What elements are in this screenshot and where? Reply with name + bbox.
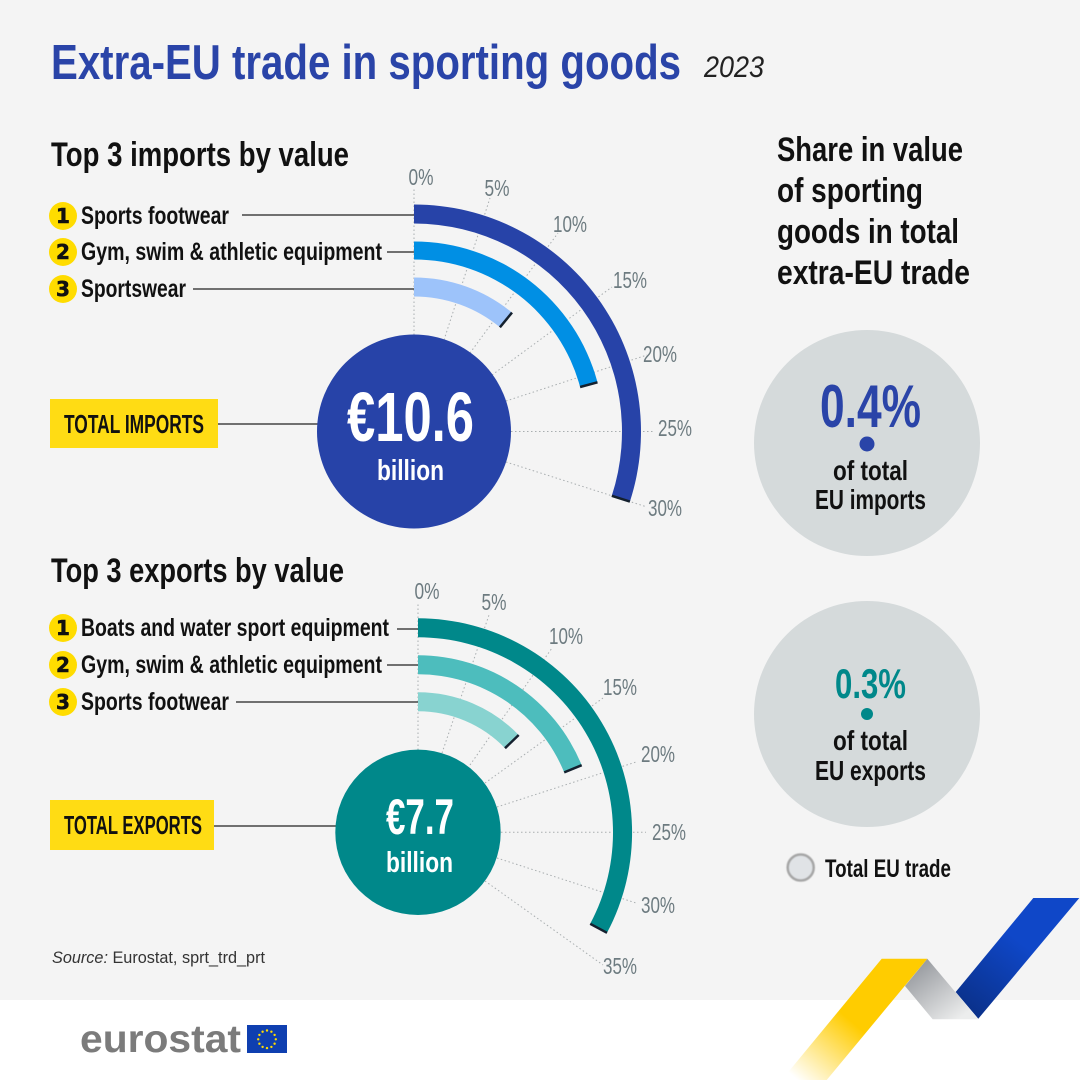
share heading: extra-EU trade <box>777 254 970 292</box>
exports item 2: Gym, swim & athletic equipment <box>81 651 383 679</box>
imports share circle: 0.4% <box>820 373 921 440</box>
exports share circle <box>754 601 980 827</box>
exports percentage scale: 25% <box>652 819 686 845</box>
legend: total EU trade <box>788 854 951 883</box>
imports item 3: Sportswear <box>81 275 186 303</box>
imports item 3 <box>49 275 414 303</box>
share heading: Share in value <box>777 131 963 169</box>
imports arc 2: gym, swim and athletic equipment <box>414 242 598 387</box>
imports item 2: Gym, swim & athletic equipment <box>81 238 383 266</box>
exports percentage scale: 30% <box>641 892 675 918</box>
imports arc 3: sportswear <box>414 277 512 327</box>
year: 2023 <box>703 51 764 84</box>
imports item 1: Sports footwear <box>81 202 229 230</box>
total imports circle: billion <box>377 455 444 487</box>
exports share circle: EU exports <box>815 755 926 786</box>
exports item 3: Sports footwear <box>81 688 229 716</box>
share heading: of sporting <box>777 172 923 210</box>
source: Source: Eurostat, sprt_trd_prt <box>52 948 265 967</box>
imports share circle: of total <box>833 455 908 486</box>
exports item 2: 2 <box>56 653 70 677</box>
imports percentage scale: 20% <box>643 341 677 367</box>
imports percentage scale: 5% <box>484 175 510 201</box>
exports arc 3: sports footwear <box>418 692 519 748</box>
exports percentage scale: 10% <box>549 623 583 649</box>
imports percentage scale: 30% <box>648 495 682 521</box>
exports percentage scale: 15% <box>603 674 637 700</box>
imports percentage scale: 25% <box>658 415 692 441</box>
total imports circle: €10.6 <box>347 378 474 456</box>
total exports circle: €7.7 <box>386 789 454 845</box>
footer band <box>0 1000 1080 1080</box>
panel: exports <box>49 552 686 979</box>
total exports circle <box>335 750 501 915</box>
total imports circle <box>317 334 511 528</box>
eurostat logo: eurostat <box>80 1018 241 1061</box>
imports share circle: EU imports <box>815 484 926 515</box>
total imports label: TOTAL IMPORTS <box>64 409 204 439</box>
exports share circle: of total <box>833 725 908 756</box>
imports percentage scale: 15% <box>613 267 647 293</box>
imports arc 1: sports footwear <box>414 204 641 502</box>
exports percentage scale <box>414 578 686 979</box>
exports arc 1: boats and water sport equipment <box>418 618 632 933</box>
exports percentage scale: 5% <box>482 589 506 615</box>
exports percentage scale: 0% <box>414 578 440 604</box>
total exports label <box>50 800 336 850</box>
total exports circle: billion <box>386 847 453 879</box>
share heading <box>777 131 970 292</box>
exports item 3: 3 <box>56 690 70 714</box>
exports percentage scale: 20% <box>641 741 675 767</box>
imports item 1: 1 <box>56 204 70 228</box>
share heading: goods in total <box>777 213 959 251</box>
total imports label <box>50 399 318 448</box>
imports item 1 <box>49 202 414 230</box>
imports share circle <box>754 330 980 556</box>
imports heading: Top 3 imports by value <box>51 136 349 174</box>
legend: total EU trade: Total EU trade <box>825 855 951 883</box>
title: Extra-EU trade in sporting goods <box>51 36 681 90</box>
exports percentage scale: 35% <box>603 953 637 979</box>
panel: imports <box>49 136 692 528</box>
exports arc 2: gym, swim and athletic equipment <box>418 655 582 772</box>
imports percentage scale <box>408 164 692 521</box>
panel: share in total extra-EU trade <box>754 131 980 883</box>
imports item 3: 3 <box>56 277 70 301</box>
imports percentage scale: 10% <box>553 211 587 237</box>
exports share circle: 0.3% <box>835 660 906 707</box>
exports item 1: Boats and water sport equipment <box>81 614 390 642</box>
ribbon decoration <box>782 898 1079 1080</box>
exports item 1: 1 <box>56 616 70 640</box>
exports heading: Top 3 exports by value <box>51 552 344 590</box>
imports item 2: 2 <box>56 240 70 264</box>
imports percentage scale: 0% <box>408 164 434 190</box>
total exports label: TOTAL EXPORTS <box>64 810 202 840</box>
exports item 3 <box>49 688 418 716</box>
